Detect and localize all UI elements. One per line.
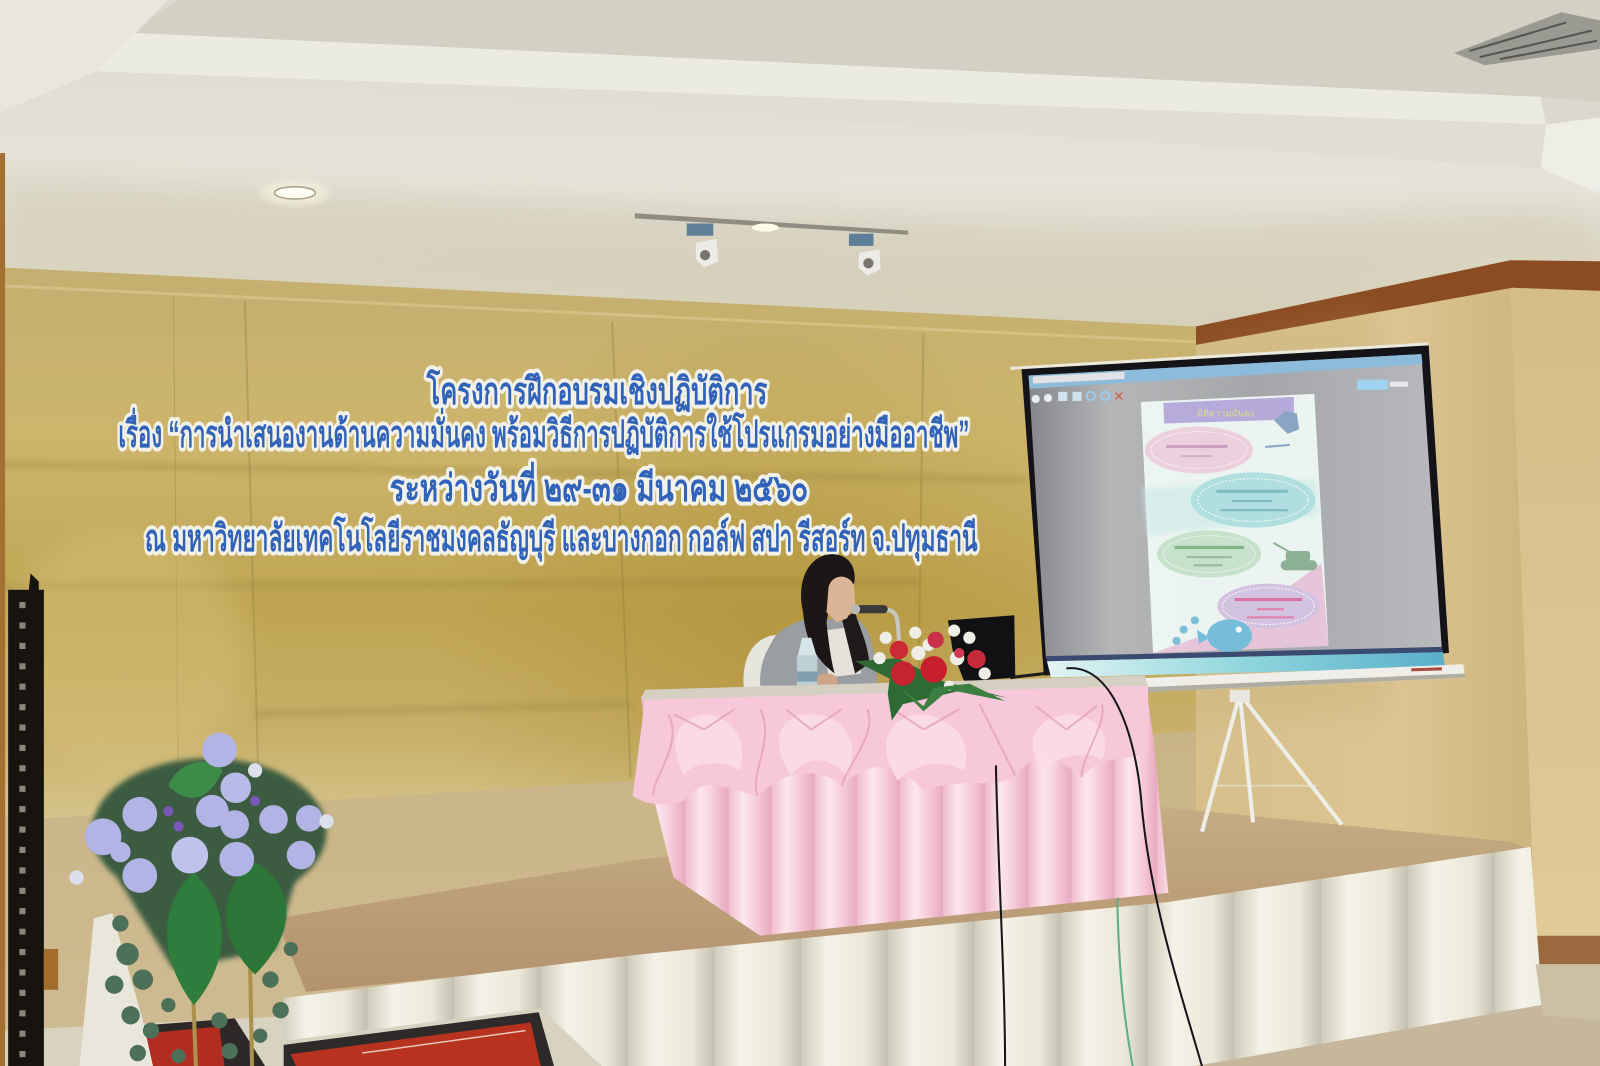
cables [996, 668, 1202, 1066]
table flower arrangement [855, 624, 1008, 720]
projection screen [1010, 344, 1449, 678]
dark leaves [92, 758, 327, 905]
microphone [850, 604, 899, 641]
screen housing bar [1061, 664, 1465, 696]
right wall [1196, 260, 1600, 980]
tripod stand [1202, 690, 1342, 832]
ceiling [0, 0, 1600, 337]
status bar [1046, 647, 1443, 661]
hair [801, 554, 855, 673]
table skirt [633, 676, 1168, 936]
window toolbar [1032, 372, 1408, 404]
cardigan [760, 618, 878, 686]
floor [1194, 1005, 1600, 1066]
white cloth behind flowers [80, 913, 153, 1066]
track lights [635, 213, 908, 276]
water bottle [797, 638, 817, 696]
stage carpet [276, 806, 1531, 992]
carved wooden screen [0, 153, 58, 1066]
projected document page: มิติความมั่นคง [1197, 406, 1254, 418]
icon: helicopter [1265, 412, 1298, 447]
laptop [948, 615, 1045, 682]
banner line 1: โครงการฝึกอบรมเชิงปฏิบัติการ [426, 369, 768, 412]
bubble: lavender [1217, 584, 1319, 629]
screen frame [1021, 344, 1449, 676]
lower wall under banner [0, 727, 1196, 1031]
bubble: teal [1191, 472, 1315, 528]
bubble: pink [1145, 427, 1253, 473]
presenter [760, 554, 878, 688]
face [827, 577, 855, 622]
projected document page [1141, 394, 1329, 653]
brass poles [192, 959, 252, 1066]
downlight [260, 180, 330, 206]
projected window [1029, 354, 1442, 658]
icon: whale [1172, 616, 1252, 652]
hand [815, 673, 838, 688]
banner line 4: ณ มหาวิทยาลัยเทคโนโลยีราชมงคลธัญบุรี และบางกอก กอล์ฟ สปา รีสอร์ท จ.ปทุมธานี [145, 516, 978, 562]
banner line 3: ระหว่างวันที่ ๒๙-๓๑ มีนาคม ๒๕๖๐ [390, 461, 808, 509]
fern leaves [167, 872, 222, 1005]
window toolbar: ✕ [1113, 389, 1124, 404]
white stage skirt [284, 847, 1543, 1066]
ruffled swag [633, 686, 1149, 804]
purple flower stand [69, 733, 334, 1066]
icon: tank [1273, 543, 1317, 570]
ivy foliage [105, 915, 298, 1063]
banner line 2: เรื่อง “การนำเสนองานด้านความมั่นคง พร้อมวิธีการปฏิบัติการใช้โปรแกรมอย่างมืออาชีพ” [118, 407, 969, 455]
chair [743, 635, 796, 690]
banner title text [118, 369, 978, 562]
ceiling vent [1454, 12, 1600, 65]
screen top rail [1010, 344, 1429, 368]
document header [1163, 397, 1294, 423]
blue blooms [85, 733, 322, 893]
red equipment box [104, 1012, 554, 1066]
curtain backdrop [0, 267, 1196, 818]
shirt [822, 627, 861, 678]
bubble: green [1157, 531, 1261, 578]
